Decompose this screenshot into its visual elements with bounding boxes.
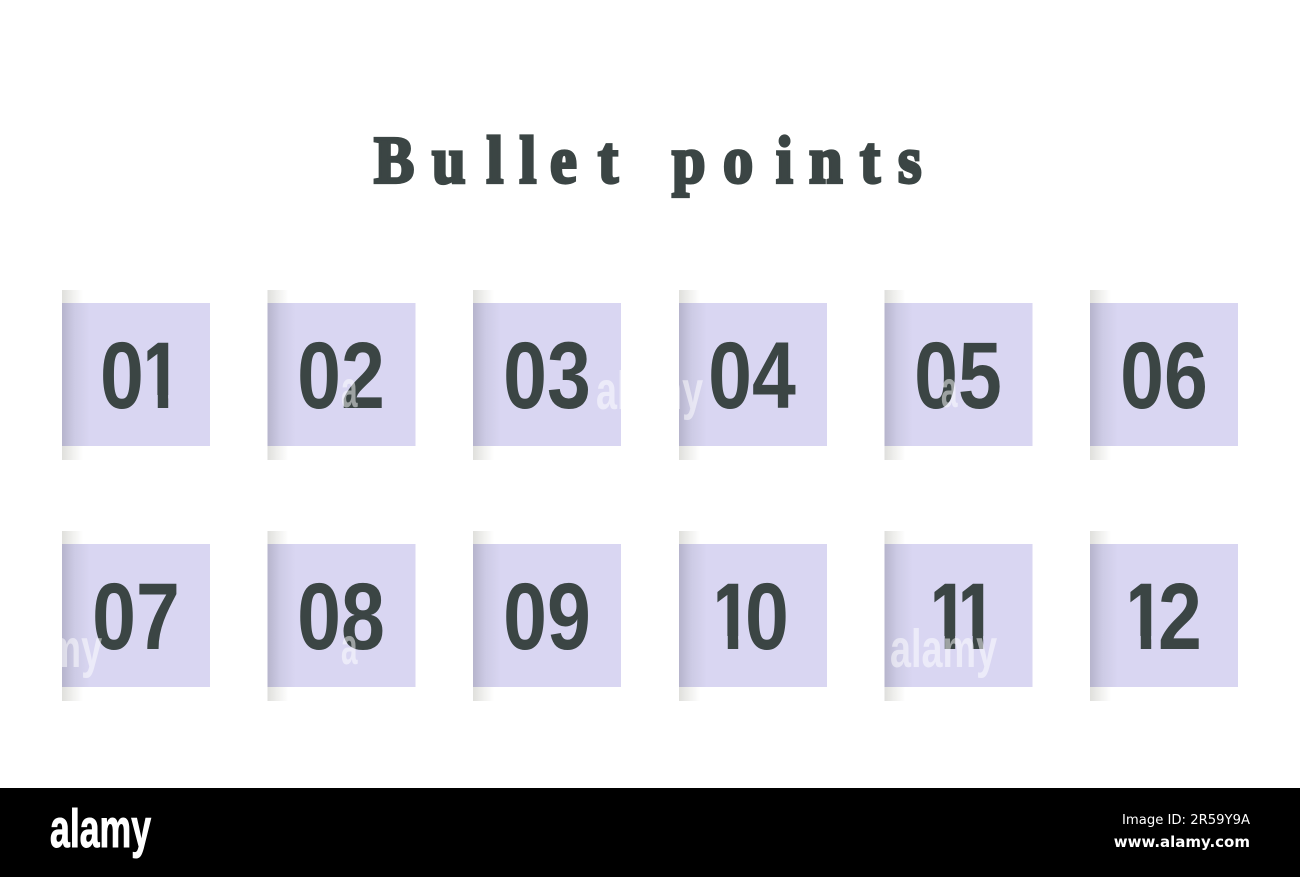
panel: bullet 10: 0: [745, 564, 789, 670]
panel: bullet 05: 05: [914, 323, 1002, 429]
panel: bullet 11: 1: [926, 564, 970, 670]
watermark fragment on tile 08: a: [341, 617, 358, 676]
panel: bullet 03: 03: [503, 323, 591, 429]
image id: Image ID: 2R59Y9A: [1122, 813, 1250, 828]
title: Bullet points: [374, 123, 922, 197]
watermark: alamy over tile 11: alamy: [890, 618, 997, 679]
panel: bullet 01: [62, 290, 210, 460]
panel: bullet 06: 06: [1120, 323, 1208, 429]
panel: bullet 10: 1: [709, 564, 753, 670]
panel: bullet 08: 08: [297, 564, 385, 670]
website: www.alamy.com: [1114, 833, 1250, 851]
panel: bullet 11: 1: [954, 564, 998, 670]
panel: bullet 06: [1090, 290, 1238, 460]
panel: bullet 12: [1090, 531, 1238, 701]
panel: bullet 04: [679, 290, 827, 460]
panel: bullet 01: 0: [100, 323, 144, 429]
watermark: alamy over tiles 03 and 04: alamy: [596, 360, 703, 421]
panel: bullet 02: [268, 290, 416, 460]
panel: bullet 12: 2: [1158, 564, 1202, 670]
panel: bullet 02: 02: [297, 323, 385, 429]
watermark fragment on tile 02: a: [341, 360, 358, 419]
panel: bullet 09: [473, 531, 621, 701]
panel: bullet 11: [884, 531, 1032, 701]
watermark fragment on tile 05: a: [941, 360, 958, 419]
panel: bullet 09: 09: [503, 564, 591, 670]
panel: bullet 03: [473, 290, 621, 460]
panel: bullet 01: 1: [139, 323, 183, 429]
panel: bullet 04: 04: [708, 323, 796, 429]
panel: bullet 07: [62, 531, 210, 701]
footer band: [0, 788, 1300, 877]
panel: bullet 08: [268, 531, 416, 701]
panel: bullet 12: 1: [1122, 564, 1166, 670]
panel: bullet 10: [679, 531, 827, 701]
panel: bullet 05: [884, 290, 1032, 460]
footer logo: alamy: [50, 799, 151, 859]
panel: bullet 07: 07: [92, 564, 180, 670]
